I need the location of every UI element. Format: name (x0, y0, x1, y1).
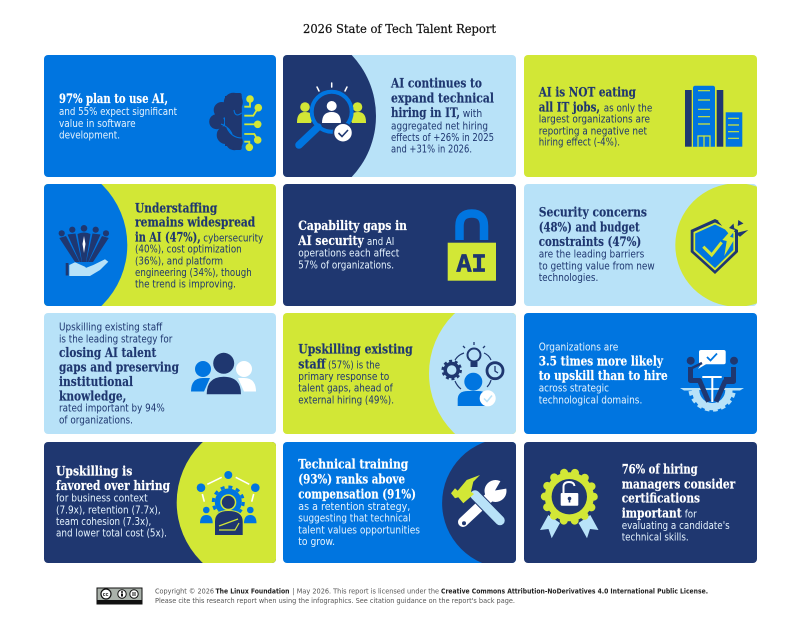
text block: gaps and preserving (59, 361, 179, 376)
text block: Upskilling existing (298, 343, 413, 358)
text block: hiring effect (-4%). (539, 137, 620, 149)
text block (135, 201, 264, 290)
text block: to upskill than to hire (539, 369, 668, 384)
text block: expand technical (391, 91, 495, 106)
panel: upskilling strategy (44, 313, 276, 434)
icon: magnifier with people (297, 83, 366, 145)
text block: important (622, 506, 682, 521)
text block: as only the (604, 103, 652, 115)
text block: talent values opportunities (298, 524, 420, 536)
panel: technical hiring (283, 55, 516, 177)
text block: (40%), cost optimization (135, 244, 242, 256)
panel: understaffing (44, 184, 276, 306)
text block: managers consider (622, 477, 736, 492)
panel background (524, 313, 757, 434)
text block: technological domains. (539, 395, 642, 407)
text block: reporting a negative net (539, 125, 647, 137)
text block: Upskilling existing staff (59, 322, 163, 334)
text block: certifications (622, 492, 700, 507)
text block: AI continues to (390, 77, 482, 92)
text block: (36%), and platform (135, 255, 223, 267)
text block: compensation (91%) (298, 487, 416, 502)
panel background (44, 184, 276, 306)
text block: 76% of hiring (622, 462, 698, 477)
panel background (44, 55, 276, 177)
panel: certifications (524, 442, 757, 563)
icon: person with gear, bulb and clock (443, 342, 503, 406)
text block: Upskilling is (56, 464, 133, 479)
text block: Capability gaps in (298, 219, 407, 234)
panel background (283, 442, 516, 563)
icon: hammer and wrench (451, 475, 510, 525)
text block: team cohesion (7.3x), (56, 516, 151, 528)
text block: and 55% expect significant (59, 106, 177, 118)
text block (622, 462, 736, 543)
text block: 57% of organizations. (298, 259, 394, 271)
text block: engineering (34%), though (135, 267, 252, 279)
text block: remains widespread (135, 216, 255, 231)
text block: the trend is improving. (135, 278, 236, 290)
text block (390, 77, 495, 155)
text block: closing AI talent (59, 346, 157, 361)
panel: security concerns (524, 184, 757, 306)
text block: external hiring (49%). (298, 394, 394, 406)
text block: (57%) is the (328, 359, 380, 371)
text block: for business context (56, 493, 148, 505)
footer: license (97, 588, 708, 605)
icon: broken shield (691, 219, 748, 274)
footer text: The Linux Foundation (216, 588, 290, 596)
text block: evaluating a candidate's (622, 520, 730, 532)
text block: development. (59, 130, 120, 142)
icon: office buildings (685, 86, 742, 147)
footer text: Copyright © 2026 (155, 588, 214, 596)
text block: constraints (47%) (539, 235, 641, 250)
text block (298, 458, 420, 548)
text block: are the leading barriers (539, 248, 644, 260)
icon: hand holding people (59, 225, 109, 276)
text block: primary response to (298, 371, 389, 383)
footer text: Creative Commons Attribution-NoDerivatives 4.0 International Public License. (441, 588, 708, 596)
icon: team network (197, 471, 260, 535)
text block (539, 342, 668, 407)
icon: meeting over gear (680, 350, 744, 410)
footer text (155, 588, 708, 605)
text block: (7.9x), retention (7.7x), (56, 504, 161, 516)
icon: certification badge with lock (540, 472, 598, 538)
icon: brain circuit (209, 93, 262, 151)
text block: with (463, 108, 482, 120)
text block: to grow. (298, 536, 335, 548)
panel: primary response (283, 313, 516, 434)
panel background (283, 313, 516, 434)
panel background (524, 55, 757, 177)
panel: capability gaps (283, 184, 516, 306)
panel background (524, 442, 757, 563)
panel background (44, 313, 276, 434)
panel background (283, 55, 516, 177)
text block: suggesting that technical (298, 513, 411, 525)
text block: staff (298, 357, 327, 372)
text block: Security concerns (539, 206, 647, 221)
text block (538, 86, 652, 149)
panel background (283, 184, 516, 306)
footer text: | May 2026. This report is licensed under the (292, 588, 439, 596)
text block: Understaffing (135, 201, 217, 216)
text block: knowledge, (59, 390, 126, 405)
text block: cybersecurity (203, 232, 264, 244)
text block: AI is NOT eating (538, 86, 636, 101)
text block: as a retention strategy, (298, 501, 410, 513)
icon: AI padlock: AI (456, 250, 486, 280)
panel: technical training (283, 442, 516, 563)
icon: AI padlock (448, 214, 496, 281)
icon: Creative Commons badge (97, 588, 142, 604)
panel: more likely to upskill (524, 313, 757, 434)
text block (56, 464, 170, 540)
panel: AI adoption (44, 55, 276, 177)
text block: 97% plan to use AI, (59, 92, 168, 107)
text block (59, 92, 177, 142)
text block: operations each affect (298, 248, 400, 260)
text block (539, 206, 655, 284)
text block: hiring in IT, (391, 106, 460, 121)
text block: talent gaps, ahead of (298, 383, 393, 395)
text block: (48%) and budget (539, 220, 640, 235)
panel background (524, 184, 757, 306)
text block: is the leading strategy for (59, 333, 172, 345)
icon: three people (191, 353, 256, 394)
text block: (93%) ranks above (298, 472, 405, 487)
text block: rated important by 94% (59, 403, 165, 415)
text block: technologies. (539, 272, 598, 284)
text block: technical skills. (622, 531, 689, 543)
panel: favored over hiring (44, 442, 276, 563)
title: 2026 State of Tech Talent Report (303, 21, 496, 36)
panel: AI not eating jobs (524, 55, 757, 177)
icon: Creative Commons badge: cc (103, 592, 109, 598)
text block (297, 219, 407, 271)
text block: of organizations. (59, 414, 133, 426)
text block: 3.5 times more likely (539, 354, 664, 369)
text block: all IT jobs, (539, 101, 600, 116)
text block: to getting value from new (539, 260, 655, 272)
text block: aggregated net hiring (391, 120, 488, 132)
text block: value in software (59, 118, 136, 130)
footer text: Please cite this research report when using the infographics. See citation guidance on the report's back page. (155, 597, 515, 605)
text block: for (685, 508, 697, 520)
text block (298, 343, 413, 406)
text block: effects of +26% in 2025 (391, 132, 494, 144)
text block: Organizations are (539, 342, 618, 354)
text block: and AI (367, 236, 394, 248)
text block: in AI (47%), (135, 230, 201, 245)
text block: largest organizations are (539, 114, 650, 126)
text block: favored over hiring (56, 479, 170, 494)
text block: Technical training (298, 458, 408, 473)
text block (59, 322, 179, 426)
text block: institutional (59, 375, 133, 390)
text block: and +31% in 2026. (391, 143, 472, 155)
text block: AI security (297, 234, 365, 249)
text block: and lower total cost (5x). (56, 528, 167, 540)
panel background (44, 442, 276, 563)
text block: across strategic (539, 383, 609, 395)
